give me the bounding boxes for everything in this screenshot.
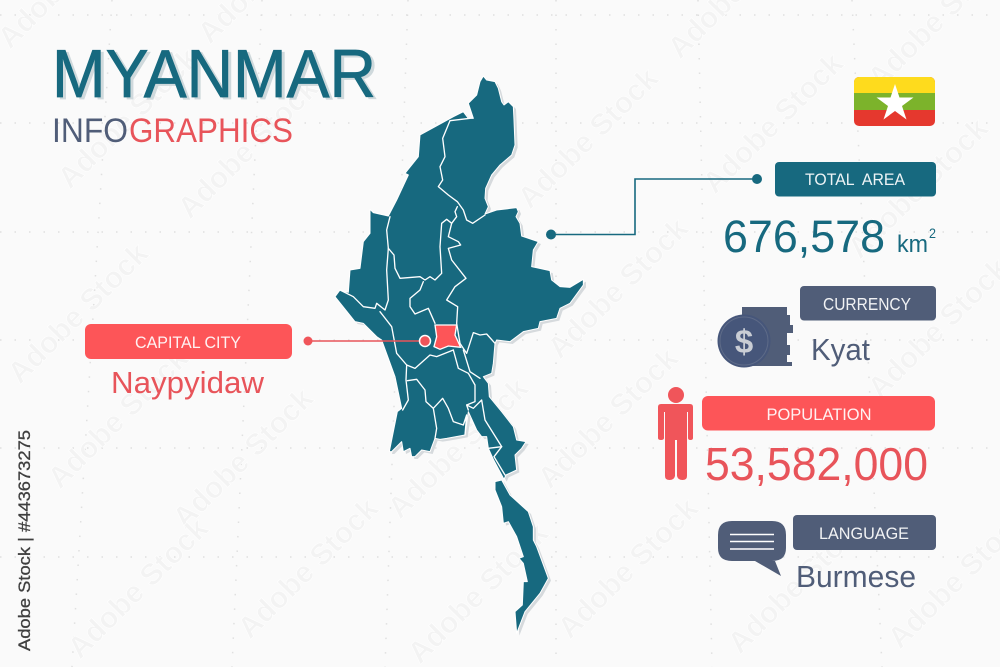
stock id side label: Adobe Stock | #443673275 bbox=[15, 430, 34, 651]
watermarks: Adobe Stock bbox=[172, 72, 325, 225]
subtitle: INFOGRAPHICS: INFO bbox=[52, 112, 128, 150]
currency label bar bbox=[800, 286, 936, 320]
watermarks: Adobe Stock bbox=[2, 237, 155, 390]
watermarks: Adobe Stock bbox=[542, 212, 695, 365]
language value: Burmese bbox=[796, 559, 916, 594]
watermarks: Adobe Stock bbox=[62, 512, 215, 665]
capital city value: Naypyidaw bbox=[111, 365, 265, 400]
watermarks: Adobe Stock bbox=[382, 372, 535, 525]
icon: coins: $ bbox=[735, 323, 753, 360]
total area label bar: TOTAL AREA bbox=[805, 170, 906, 189]
watermarks: Adobe Stock bbox=[532, 342, 685, 495]
total area value: km bbox=[897, 231, 928, 258]
language label bar: LANGUAGE bbox=[819, 524, 909, 543]
watermarks: Adobe Stock bbox=[512, 62, 665, 215]
icon: person bbox=[658, 387, 693, 480]
total area label bar bbox=[775, 162, 936, 196]
watermarks: Adobe Stock bbox=[42, 342, 195, 495]
language label bar bbox=[793, 515, 936, 550]
map of Myanmar bbox=[335, 76, 586, 636]
total area leader line bbox=[546, 174, 762, 240]
subtitle: INFOGRAPHICS: GRAPHICS bbox=[129, 112, 293, 150]
watermarks: Adobe Stock bbox=[402, 517, 555, 667]
watermarks: Adobe Stock bbox=[697, 47, 850, 200]
currency value: Kyat bbox=[811, 332, 870, 367]
capital city leader line bbox=[304, 336, 430, 346]
icon: coins bbox=[718, 307, 793, 368]
watermarks: Adobe Stock bbox=[552, 492, 705, 645]
title: MYANMAR: MYANMAR bbox=[55, 38, 379, 114]
total area value: 676,578 bbox=[723, 211, 885, 262]
capital region highlight bbox=[434, 325, 461, 349]
watermarks: Adobe Stock bbox=[167, 382, 320, 535]
title: MYANMAR: MYANMAR bbox=[52, 36, 376, 112]
watermarks: Adobe Stock bbox=[722, 507, 875, 660]
flag of Myanmar bbox=[854, 77, 935, 126]
watermarks: Adobe Stock bbox=[52, 42, 205, 195]
total area value: 2 bbox=[929, 225, 936, 241]
population label bar bbox=[702, 396, 935, 430]
subtitle: INFOGRAPHICS bbox=[52, 112, 293, 150]
population label bar: POPULATION bbox=[766, 405, 872, 424]
watermarks: Adobe Stock bbox=[232, 492, 385, 645]
population value: 53,582,000 bbox=[705, 438, 928, 490]
icon: speech bubble bbox=[718, 521, 786, 576]
watermarks: Adobe Stock bbox=[842, 112, 995, 265]
currency label bar: CURRENCY bbox=[823, 294, 911, 314]
capital city label bar: CAPITAL CITY bbox=[135, 333, 241, 352]
capital city label bar bbox=[85, 324, 292, 359]
